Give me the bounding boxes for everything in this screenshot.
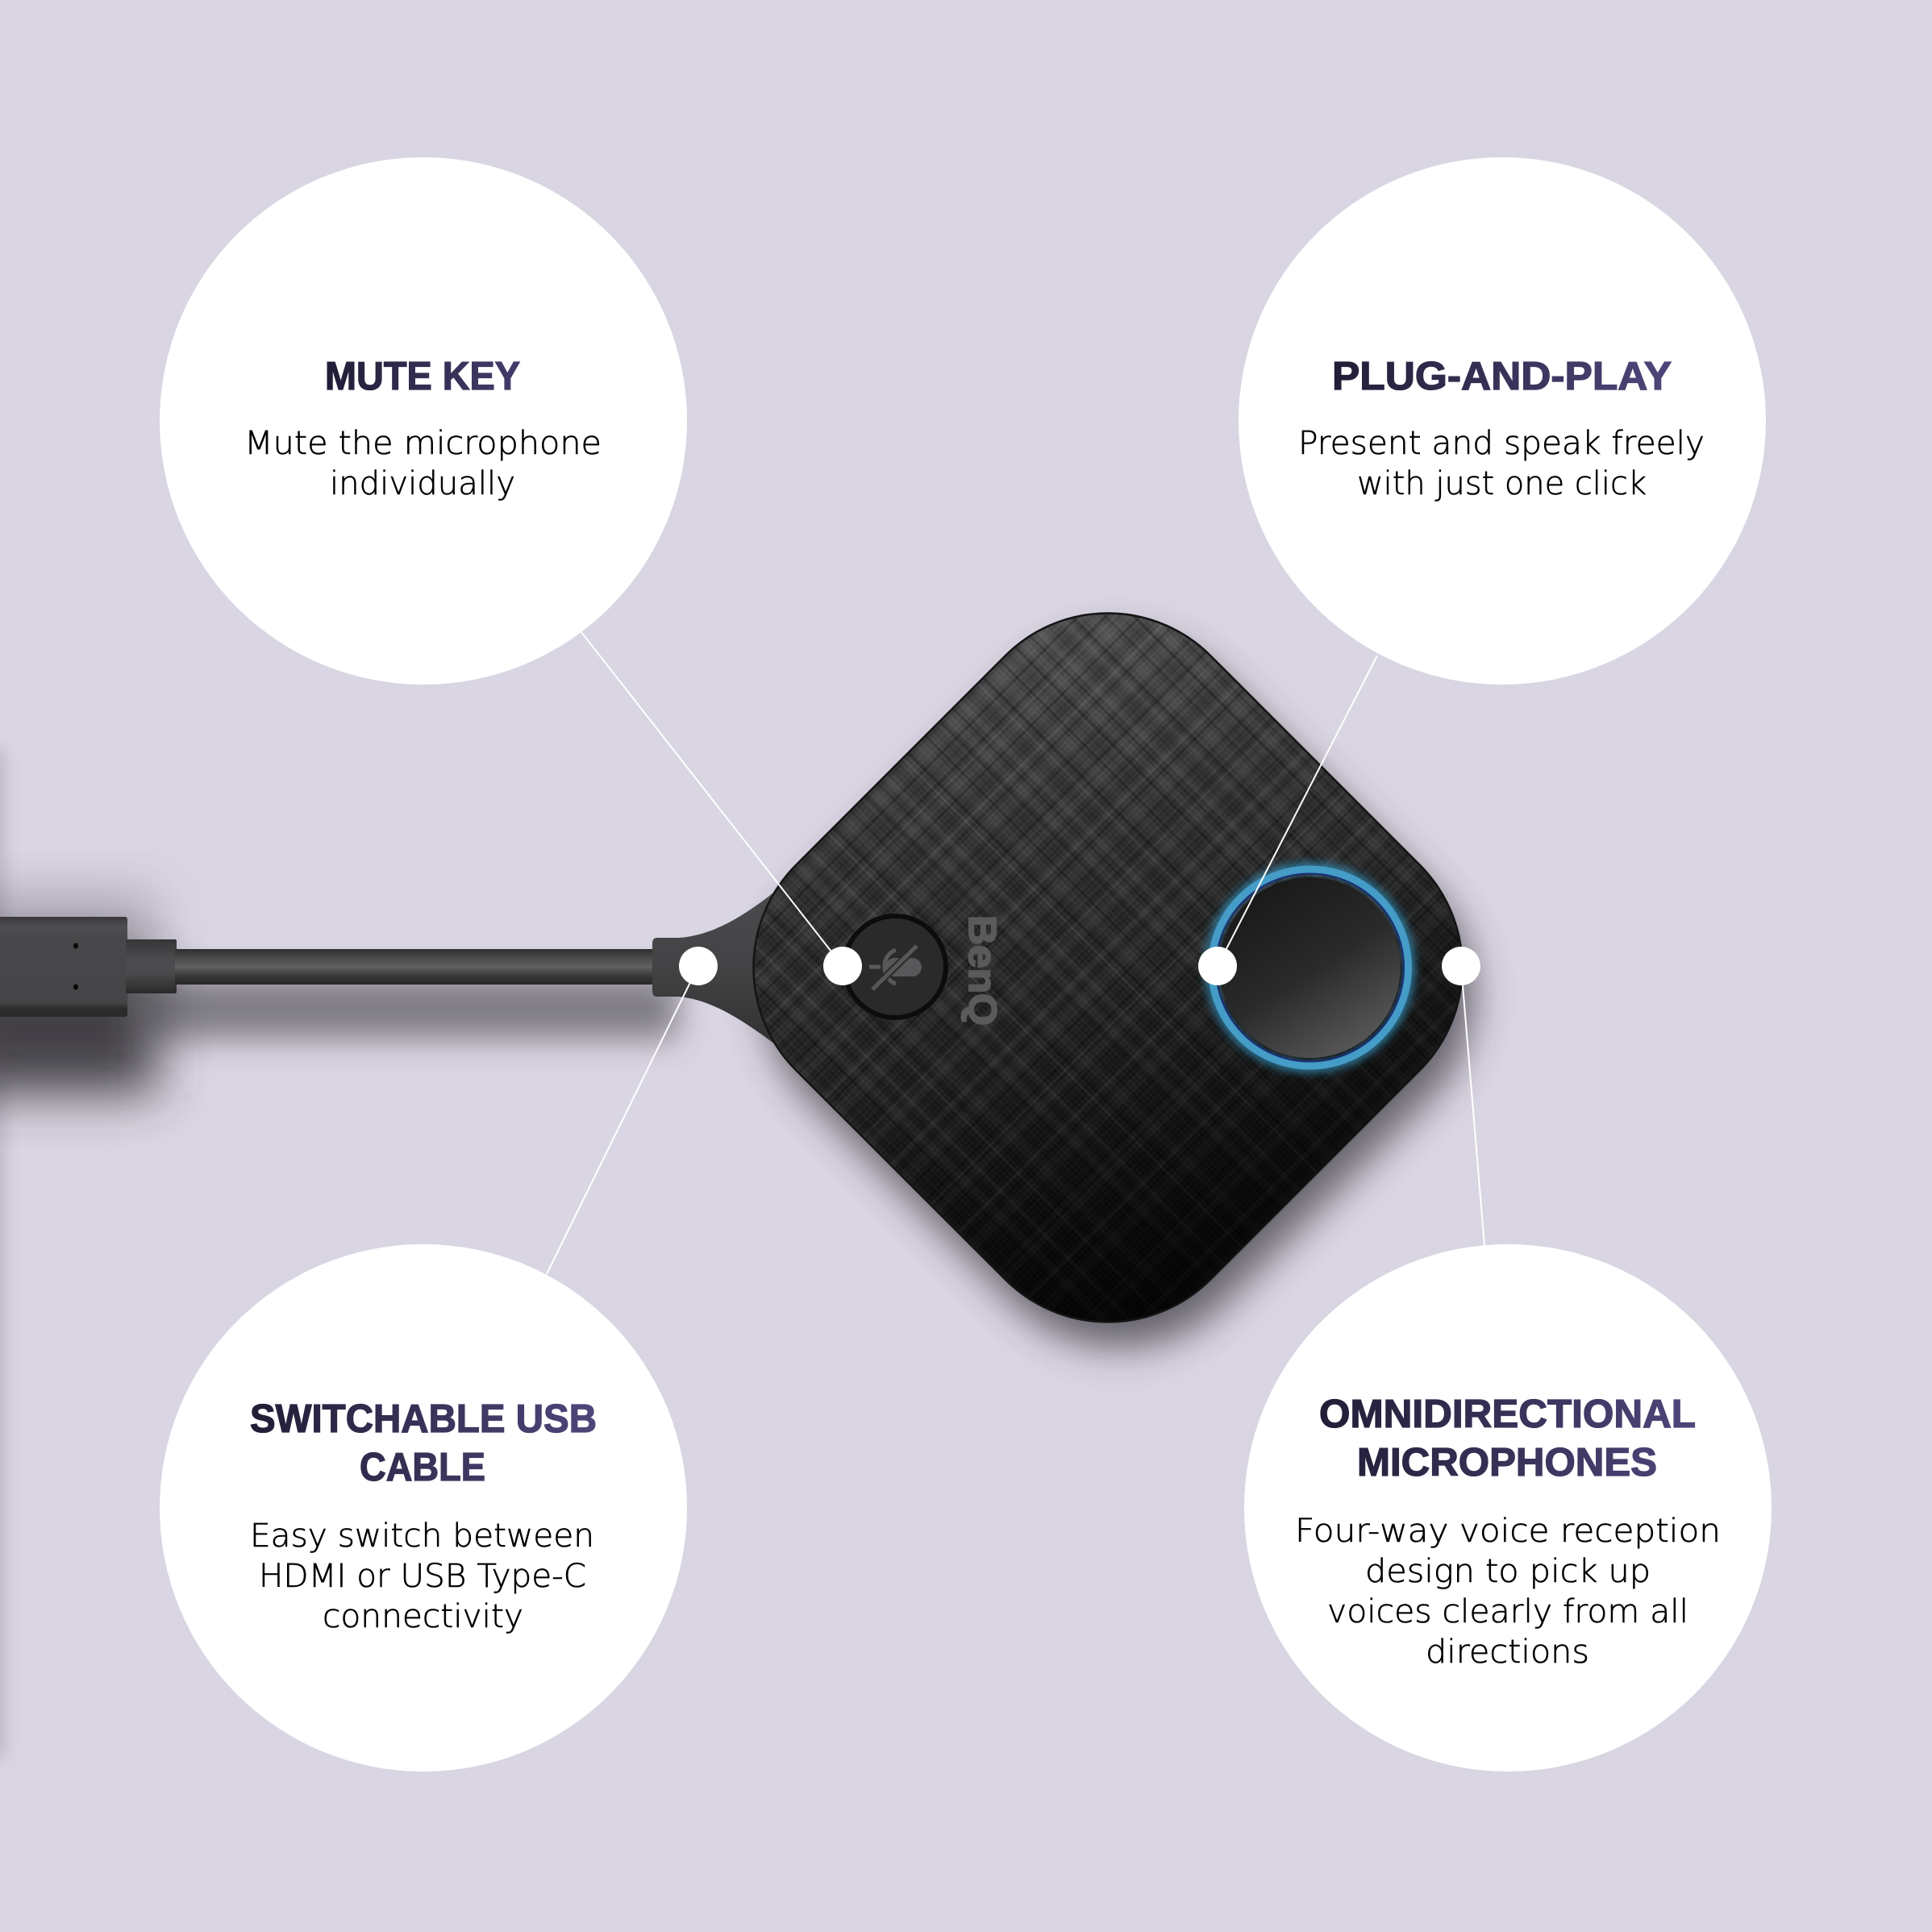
connector collar bbox=[126, 939, 177, 993]
panel circle bbox=[160, 1244, 687, 1772]
leader line bbox=[1461, 966, 1484, 1246]
connector pin holes bbox=[73, 943, 78, 990]
heading bbox=[250, 1397, 597, 1489]
button face bbox=[1219, 877, 1400, 1058]
callout: mute key bbox=[581, 632, 862, 985]
description: Four-way voice reception bbox=[1295, 1513, 1721, 1550]
cable bbox=[175, 949, 656, 985]
device rim bbox=[693, 553, 1522, 1382]
device body bbox=[752, 612, 1463, 1323]
description: voices clearly from all bbox=[1327, 1593, 1688, 1630]
description: Easy switch between bbox=[250, 1518, 594, 1555]
description bbox=[244, 425, 602, 502]
description: connectivity bbox=[323, 1598, 523, 1635]
description: Mute the microphone bbox=[244, 425, 602, 462]
panel circle bbox=[1239, 157, 1766, 685]
panel: plug-and-play bbox=[1239, 157, 1766, 685]
icon: muted microphone bbox=[869, 946, 922, 989]
blue ring bbox=[1211, 869, 1408, 1066]
heading: SWITCHABLE USB bbox=[250, 1397, 597, 1441]
crosshatch texture bbox=[755, 614, 1459, 1321]
description: design to pick up bbox=[1365, 1553, 1651, 1590]
drop shadows bbox=[0, 579, 1534, 1758]
description: individually bbox=[330, 465, 515, 502]
leader line bbox=[547, 966, 698, 1274]
marker dot bbox=[679, 947, 718, 985]
description: with just one click bbox=[1357, 465, 1647, 502]
description: Present and speak freely bbox=[1298, 425, 1705, 462]
panel: switchable usb cable bbox=[160, 1244, 687, 1772]
description: HDMI or USB Type-C bbox=[259, 1558, 586, 1595]
marker dot bbox=[1198, 947, 1237, 985]
surface shading bbox=[863, 827, 1460, 1321]
description bbox=[1295, 1513, 1721, 1671]
description bbox=[250, 1518, 594, 1635]
heading bbox=[1319, 1393, 1696, 1484]
callout: plug-and-play bbox=[1198, 656, 1377, 985]
heading: MUTE KEY bbox=[325, 355, 520, 398]
heading: MICROPHONES bbox=[1357, 1441, 1657, 1484]
panel circle bbox=[1244, 1244, 1772, 1772]
panel: mute key bbox=[160, 157, 687, 685]
marker dot bbox=[1442, 947, 1480, 985]
mute button bbox=[842, 914, 948, 1020]
usb connector body bbox=[0, 917, 127, 1017]
callout: omnidirectional microphones bbox=[1442, 947, 1484, 1246]
main button with blue light ring bbox=[1210, 868, 1409, 1068]
panel: omnidirectional microphones bbox=[1244, 1244, 1772, 1772]
marker dot bbox=[823, 947, 862, 985]
leader line bbox=[1218, 656, 1377, 966]
logo: BenQ: BenQ bbox=[960, 915, 1003, 1026]
usb cable bbox=[0, 887, 781, 1048]
device surface bbox=[755, 614, 1460, 1321]
heading: CABLE bbox=[360, 1446, 485, 1489]
leader line bbox=[581, 632, 843, 966]
callout: switchable usb cable bbox=[547, 947, 718, 1274]
description bbox=[1298, 425, 1705, 502]
panel circle bbox=[160, 157, 687, 685]
strain relief tab bbox=[652, 887, 781, 1048]
heading: PLUG-AND-PLAY bbox=[1332, 355, 1672, 398]
heading: OMNIDIRECTIONAL bbox=[1319, 1393, 1696, 1436]
ring glow bbox=[1210, 868, 1409, 1068]
description: directions bbox=[1426, 1634, 1589, 1671]
